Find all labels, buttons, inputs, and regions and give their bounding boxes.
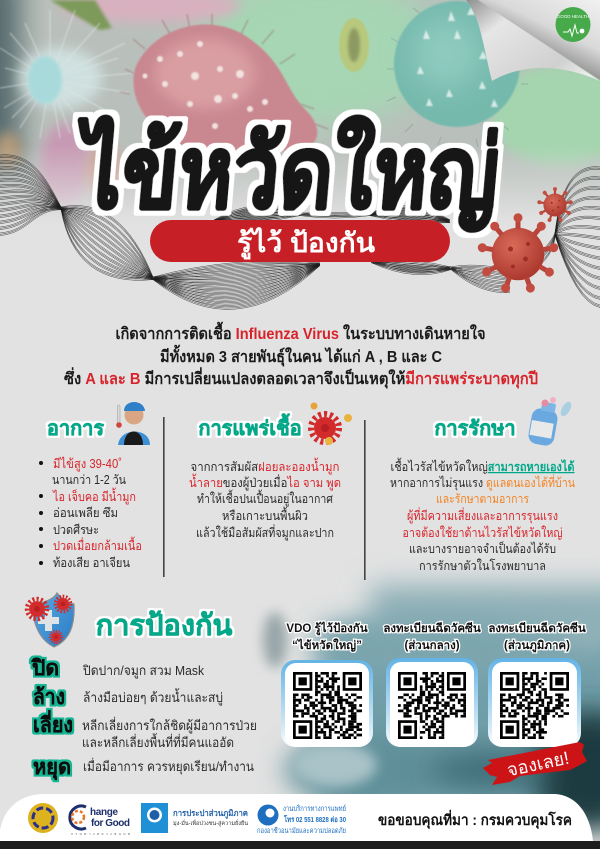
- title: ไข้หวัดใหญ่: [68, 115, 504, 232]
- prevention row: stop: [33, 756, 254, 781]
- heading: prevention: การป้องกัน: [96, 610, 233, 642]
- icon: small red virus: [537, 187, 573, 223]
- symptom list: ท้องเสีย อาเจียน: [53, 556, 130, 570]
- icon: good health logo: GOOD HEALTH: [557, 14, 589, 19]
- panel: treatment: [390, 397, 575, 573]
- divider right: [364, 420, 366, 580]
- call to action: book now: จองเลย!: [505, 748, 571, 780]
- prevention row: cover: [30, 657, 204, 680]
- subtitle pill: [150, 220, 450, 262]
- treatment text: การรักษาตัวในโรงพยาบาล: [419, 558, 546, 573]
- symptom list: [39, 457, 142, 570]
- icon: large red virus: [477, 213, 559, 294]
- prevention row: cover: ปิดปาก/จมูก สวม Mask: [82, 663, 204, 679]
- transmission text: แล้วใช้มือสัมผัสที่จมูกและปาก: [196, 524, 334, 541]
- QR card: central: [386, 658, 478, 747]
- background: fade to grey: [0, 145, 600, 230]
- transmission text: หรือเกาะบนพื้นผิว: [222, 506, 308, 523]
- prevention row: wash: ล้าง: [33, 685, 65, 709]
- icon: good health logo: [556, 7, 590, 42]
- page curl corner: [466, 0, 600, 81]
- panel: prevention: [27, 593, 257, 781]
- logo: medical services: [257, 804, 346, 835]
- intro paragraph: ซึ่ง A และ B มีการเปลี่ยนแปลงตลอดเวลาจึงเป็นเหตุให้มีการแพร่ระบาดทุกปี: [64, 367, 538, 389]
- transmission text: ทำให้เชื้อปนเปื้อนอยู่ในอากาศ: [197, 489, 333, 507]
- symptom list: ไอ เจ็บคอ มีน้ำมูก: [52, 487, 136, 505]
- decorative wave ribbons: [0, 155, 600, 309]
- prevention row: avoid: [33, 709, 257, 750]
- background: hairy pale blue virus: [0, 10, 135, 138]
- treatment text: [390, 457, 575, 573]
- prevention row: avoid: เลี่ยง: [33, 709, 73, 737]
- transmission text: [189, 457, 341, 541]
- prevention row: avoid: และหลีกเลี่ยงพื้นที่ที่มีคนแออัด: [82, 733, 234, 750]
- QR heading: video: [286, 621, 368, 652]
- footer bar: [0, 794, 600, 849]
- icon: shield with viruses: [27, 593, 74, 647]
- symptom list: ปวดศีรษะ: [53, 523, 99, 537]
- QR heading: regional: (ส่วนภูมิภาค): [504, 639, 570, 653]
- treatment text: เชื้อไวรัสไข้หวัดใหญ่สามารถหายเองได้: [390, 457, 574, 474]
- icon: sick person with thermometer: [116, 402, 150, 445]
- symptom list: ปวดเมื่อยกล้ามเนื้อ: [53, 536, 142, 553]
- credit: ขอขอบคุณที่มา : กรมควบคุมโรค: [378, 809, 572, 829]
- background: teal spiky virus: [387, 1, 528, 147]
- treatment text: และรักษาตามอาการ: [436, 492, 529, 506]
- QR heading: regional: [488, 622, 586, 653]
- QR card: regional: [488, 658, 581, 747]
- treatment text: ผู้ที่มีความเสี่ยงและอาการรุนแรง: [407, 507, 558, 524]
- prevention row: avoid: หลีกเลี่ยงการใกล้ชิดผู้มีอาการป่วย: [82, 717, 257, 734]
- treatment text: และบางรายอาจจำเป็นต้องได้รับ: [409, 541, 556, 556]
- panel: symptoms: [39, 402, 150, 570]
- background: teal virus photo, lower right: [263, 585, 600, 830]
- QR heading: central: (ส่วนกลาง): [404, 639, 460, 652]
- logo: medical services: กองอาชีวอนามัยและความปลอดภัย: [257, 826, 346, 835]
- intro paragraph: เกิดจากการติดเชื้อ Influenza Virus ในระบบทางเดินหายใจ: [116, 321, 486, 343]
- heading: treatment: การรักษา: [434, 418, 516, 440]
- QR heading: video: VDO รู้ไว้ป้องกัน: [286, 621, 368, 636]
- treatment text: อาจต้องใช้ยาต้านไวรัสไข้หวัดใหญ่: [402, 526, 562, 540]
- logo: change for good: [70, 806, 131, 836]
- subtitle pill: รู้ไว้ ป้องกัน: [237, 227, 376, 260]
- logo: medical services: งานบริการทางการแพทย์: [283, 804, 346, 813]
- prevention row: wash: ล้างมือบ่อยๆ ด้วยน้ำและสบู่: [83, 688, 223, 706]
- transmission text: น้ำลายของผู้ป่วยเมื่อไอ จาม พูด: [189, 473, 341, 491]
- prevention row: cover: ปิด: [30, 657, 59, 680]
- logo: provincial waterworks: มุ่ง-มั่น-เพื่อปวงชน-สู่ความยั่งยืน: [173, 819, 248, 827]
- intro paragraph: มีทั้งหมด 3 สายพันธุ์ในคน ได้แก่ A , B และ C: [160, 344, 442, 367]
- intro paragraph: [64, 321, 538, 389]
- icon: red virus with particles: [310, 402, 352, 445]
- symptom list: มีไข้สูง 39-40˚: [53, 457, 122, 472]
- logo: medical services: โทร 02 551 8828 ต่อ 30: [283, 814, 346, 824]
- prevention row: stop: เมื่อมีอาการ ควรหยุดเรียน/ทำงาน: [83, 758, 254, 775]
- panel: QR codes: [281, 621, 587, 785]
- QR heading: regional: ลงทะเบียนฉีดวัคซีน: [488, 622, 586, 635]
- symptom list: อ่อนเพลีย ซึม: [53, 506, 118, 520]
- background: blurred virus photo, top: [0, 0, 600, 220]
- QR heading: central: ลงทะเบียนฉีดวัคซีน: [383, 622, 481, 635]
- symptom list: นานกว่า 1-2 วัน: [52, 473, 126, 487]
- logo: change for good: hange: [90, 807, 118, 818]
- background: pink spiky virus: [120, 14, 328, 156]
- logo: provincial waterworks: [141, 803, 248, 833]
- treatment text: หากอาการไม่รุนแรง ดูแลตนเองได้ที่บ้าน: [390, 474, 575, 491]
- heading: transmission: การแพร่เชื้อ: [198, 413, 302, 440]
- icon: medicine bottle: [527, 397, 573, 447]
- logo: provincial waterworks: การประปาส่วนภูมิภาค: [173, 808, 248, 819]
- heading: symptoms: อาการ: [47, 418, 104, 440]
- logo: provincial emblem: [28, 803, 58, 833]
- divider left: [163, 417, 165, 577]
- prevention row: wash: [33, 685, 223, 709]
- QR heading: central: [383, 622, 481, 652]
- QR card: video: [281, 660, 373, 747]
- transmission text: จากการสัมผัสฝอยละอองน้ำมูก: [190, 457, 340, 475]
- QR heading: video: “ไข้หวัดใหญ่”: [292, 638, 362, 652]
- panel: transmission: [189, 402, 352, 541]
- logo: change for good: for Good: [91, 818, 130, 829]
- call to action: book now: [483, 742, 587, 785]
- logo: change for good: กรมทางหลวงชนบท: [71, 832, 131, 836]
- prevention row: stop: หยุด: [33, 756, 71, 781]
